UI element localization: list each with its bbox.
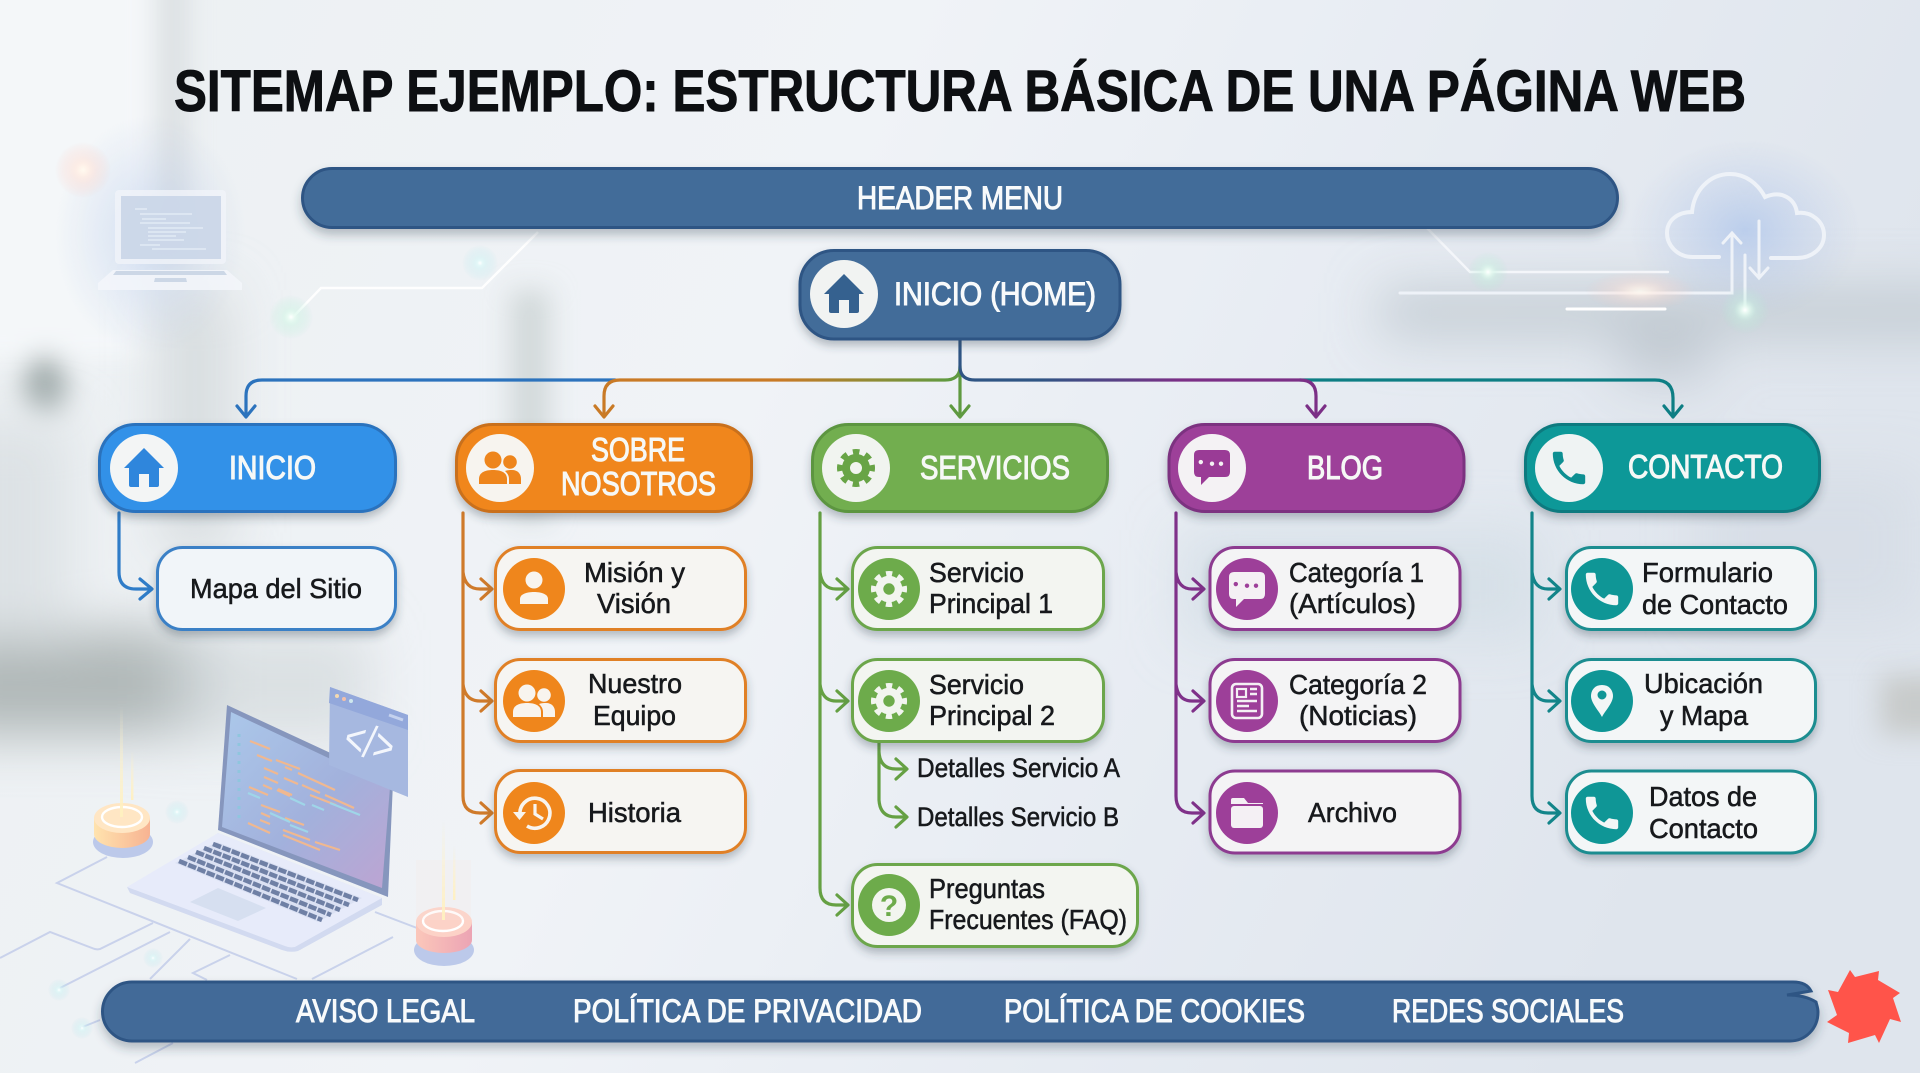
- column: CONTACTO: CONTACTO: [1628, 448, 1783, 485]
- column: SERVICIOS: SERVICIOS: [920, 449, 1070, 486]
- node: Mapa del Sitio: [158, 548, 396, 630]
- node: Datos de Contacto: [1566, 771, 1816, 853]
- connectors: Servicio Principal 2 details: [879, 743, 907, 827]
- node: Servicio Principal 1: [852, 548, 1104, 630]
- node: Servicio Principal 2: [852, 660, 1104, 742]
- footer bar: POLÍTICA DE COOKIES: [1004, 993, 1305, 1029]
- column: CONTACTO: [1526, 424, 1820, 512]
- connectors: BLOG: [1176, 513, 1204, 823]
- node: Ubicación y Mapa: Ubicación: [1644, 668, 1763, 699]
- node: Categoría 1 (Artículos): (Artículos): [1289, 588, 1416, 619]
- node: Formulario de Contacto: Formulario: [1642, 557, 1773, 588]
- connectors: SOBRE NOSOTROS: [463, 513, 492, 823]
- node: Preguntas Frecuentes (FAQ): Frecuentes (FAQ): [929, 904, 1127, 935]
- node: Ubicación y Mapa: y Mapa: [1660, 700, 1748, 731]
- column: SOBRE NOSOTROS: NOSOTROS: [561, 465, 716, 502]
- node: Categoría 1 (Artículos): [1210, 548, 1460, 630]
- column: SOBRE NOSOTROS: [456, 424, 752, 512]
- column: SOBRE NOSOTROS: SOBRE: [591, 431, 685, 468]
- node: Archivo: Archivo: [1308, 797, 1397, 828]
- decoration: cloud with arrows: [1400, 174, 1824, 334]
- connectors: INICIO: [119, 513, 152, 599]
- column: SERVICIOS: [812, 424, 1108, 512]
- node: Formulario de Contacto: [1566, 548, 1816, 630]
- node: Historia: [496, 770, 746, 852]
- illustration: isometric laptop with code and pedestals: </>: [339, 711, 400, 773]
- node: Nuestro Equipo: Nuestro: [588, 668, 682, 699]
- footer bar: POLÍTICA DE PRIVACIDAD: [573, 993, 922, 1029]
- footer bar: [103, 982, 1818, 1041]
- node: Servicio Principal 1: Servicio: [929, 557, 1024, 588]
- decoration: translucent laptop with circuit lines: [55, 142, 559, 339]
- node: Mapa del Sitio: Mapa del Sitio: [190, 573, 362, 604]
- node: Archivo: [1210, 771, 1460, 853]
- column: BLOG: BLOG: [1307, 449, 1383, 486]
- node: Categoría 2 (Noticias): Categoría 2: [1289, 669, 1427, 700]
- column: BLOG: [1169, 424, 1464, 512]
- node: Categoría 2 (Noticias): (Noticias): [1299, 700, 1417, 731]
- footer bar: AVISO LEGAL: [296, 993, 475, 1029]
- node: Misión y Visión: Visión: [597, 588, 671, 619]
- connectors: home to categories: [237, 340, 1682, 417]
- connectors: CONTACTO: [1532, 513, 1560, 823]
- node: Nuestro Equipo: Equipo: [593, 700, 676, 731]
- node: Datos de Contacto: Datos de: [1649, 781, 1757, 812]
- icon: red star badge: [1827, 970, 1901, 1043]
- node: Misión y Visión: [496, 548, 746, 630]
- column: INICIO: [100, 424, 396, 512]
- node: Servicio Principal 2: Servicio: [929, 669, 1024, 700]
- footer bar: REDES SOCIALES: [1392, 993, 1624, 1029]
- node: Nuestro Equipo: [496, 660, 746, 742]
- home node: INICIO (HOME): [894, 276, 1096, 312]
- node: Servicio Principal 2: Principal 2: [929, 700, 1055, 731]
- node: Misión y Visión: Misión y: [584, 557, 685, 588]
- home node: [800, 250, 1120, 339]
- header menu bar: [302, 168, 1618, 228]
- node: Preguntas Frecuentes (FAQ): [852, 864, 1138, 946]
- node: Preguntas Frecuentes (FAQ): Preguntas: [929, 873, 1045, 904]
- node: Historia: Historia: [588, 797, 681, 828]
- node: Datos de Contacto: Contacto: [1649, 813, 1758, 844]
- node: Servicio Principal 1: Principal 1: [929, 588, 1053, 619]
- header menu bar: HEADER MENU: [857, 180, 1063, 216]
- node: Ubicación y Mapa: [1566, 660, 1816, 742]
- text: Detalles Servicio A: Detalles Servicio A: [917, 753, 1120, 783]
- node: Categoría 2 (Noticias): [1210, 660, 1460, 742]
- node: Formulario de Contacto: de Contacto: [1642, 589, 1788, 620]
- node: Categoría 1 (Artículos): Categoría 1: [1289, 557, 1424, 588]
- node: Preguntas Frecuentes (FAQ): ?: [880, 890, 898, 923]
- text: Detalles Servicio B: Detalles Servicio B: [917, 802, 1119, 832]
- column: INICIO: INICIO: [229, 449, 316, 486]
- connectors: SERVICIOS: [820, 513, 848, 915]
- illustration: isometric laptop with code and pedestals: [0, 687, 474, 1063]
